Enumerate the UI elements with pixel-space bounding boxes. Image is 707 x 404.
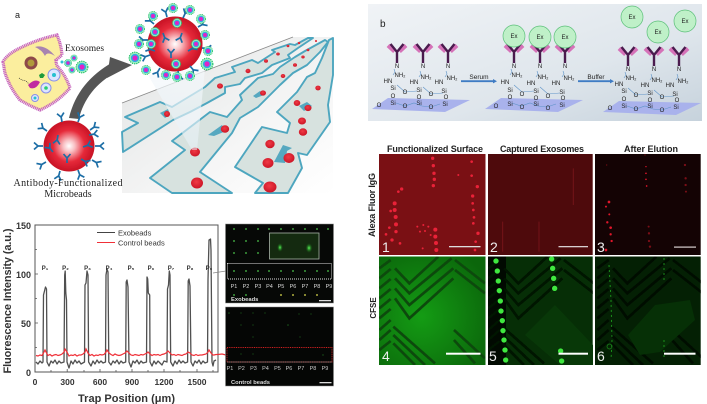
trap labels: P9 bbox=[322, 366, 328, 372]
stage 2: captured exosomes: N bbox=[512, 64, 516, 70]
peak labels bbox=[42, 266, 213, 272]
stage 1: functionalized surface: O bbox=[377, 103, 382, 109]
panel label a: a bbox=[15, 10, 20, 20]
stage 2: captured exosomes: Si bbox=[533, 89, 539, 95]
trap labels: P7 bbox=[298, 366, 304, 372]
stage 2: captured exosomes: O bbox=[494, 104, 499, 110]
arrow: Serum bbox=[461, 74, 497, 83]
dotted selection bbox=[228, 264, 332, 279]
micrograph 1 bbox=[379, 154, 486, 255]
trap labels: P3 bbox=[250, 366, 257, 372]
released Ex circles: Ex bbox=[654, 30, 662, 36]
legend: Exobeads bbox=[118, 228, 152, 238]
stage 3: after elution: HN bbox=[666, 83, 674, 89]
arrow: Serum: Serum bbox=[469, 74, 489, 81]
stage 2: captured exosomes: Si bbox=[559, 103, 565, 109]
stage 1: functionalized surface: Si bbox=[441, 89, 447, 95]
bead dots bbox=[233, 228, 329, 296]
x tick labels: 1200 bbox=[155, 377, 174, 387]
label 3 and scale bar: 3 bbox=[597, 239, 605, 255]
stage 1: functionalized surface: O bbox=[391, 94, 396, 100]
stage 1: functionalized surface: NH₂ bbox=[420, 75, 432, 81]
stage 3: after elution: Si bbox=[647, 91, 653, 97]
x tick labels: 300 bbox=[60, 377, 75, 387]
stage 3: after elution: N bbox=[626, 67, 630, 73]
stage 2: captured exosomes: Si bbox=[559, 90, 565, 96]
trap labels: P2 bbox=[238, 366, 245, 372]
dim bead dots bbox=[228, 312, 324, 356]
x tick labels bbox=[33, 377, 207, 387]
peak labels: P₇ bbox=[168, 266, 175, 272]
trap labels: P6 bbox=[286, 366, 292, 372]
label 6 and scale bar: 6 bbox=[597, 348, 605, 364]
peak labels: P₅ bbox=[128, 266, 135, 272]
x tick labels: 0 bbox=[33, 377, 38, 387]
trap labels bbox=[227, 366, 328, 372]
trap labels: P2 bbox=[243, 284, 249, 290]
stage 2: captured exosomes: N bbox=[538, 64, 542, 70]
microfluidic chip bbox=[122, 37, 333, 193]
stage 3: after elution: NH₂ bbox=[678, 79, 689, 85]
trap labels: P8 bbox=[310, 366, 316, 372]
legend bbox=[97, 228, 165, 248]
stage 1: functionalized surface: O bbox=[403, 90, 408, 96]
stage 2: captured exosomes: O bbox=[508, 95, 513, 101]
stage 3: after elution: O bbox=[660, 108, 665, 114]
label Antibody-Functionalized Microbeads: Antibody-Functionalized bbox=[14, 178, 122, 189]
stage 2: captured exosomes: O bbox=[546, 106, 551, 112]
row label CFSE: CFSE bbox=[369, 297, 378, 319]
image label: Exobeads bbox=[231, 297, 258, 303]
stage 3: after elution: Si bbox=[621, 89, 627, 95]
stage 2: captured exosomes: HN bbox=[552, 81, 560, 87]
stage 1: functionalized surface: Si bbox=[442, 102, 448, 108]
stage 1: functionalized surface: Si bbox=[390, 101, 396, 107]
stage 1: functionalized surface: Si bbox=[416, 101, 422, 107]
stage 1: functionalized surface: O bbox=[417, 95, 422, 101]
stage 2: captured exosomes: O bbox=[520, 92, 525, 98]
stage 2: captured exosomes: NH₂ bbox=[564, 76, 575, 82]
captured Ex circles bbox=[503, 25, 576, 48]
cell with exosomes bbox=[3, 35, 88, 110]
y tick labels: 100 bbox=[16, 270, 31, 280]
stage 2: captured exosomes: O bbox=[534, 96, 539, 102]
stage 1: functionalized surface: HN bbox=[410, 80, 418, 86]
stage 2: captured exosomes: Si bbox=[507, 102, 513, 108]
micrograph 2 bbox=[488, 154, 593, 255]
exosome-loaded microbead bbox=[129, 4, 213, 82]
trap labels: P9 bbox=[326, 284, 332, 290]
inset bbox=[270, 233, 319, 259]
stage 2: captured exosomes: O bbox=[561, 96, 566, 102]
stage 1: functionalized surface: HN bbox=[384, 79, 392, 85]
Control beads trace bbox=[36, 349, 226, 356]
stage 2: captured exosomes: HN bbox=[501, 80, 509, 86]
stage 1: functionalized surface: N bbox=[446, 64, 450, 70]
chart: fluorescence intensity vs trap position bbox=[2, 221, 226, 404]
trap labels: P5 bbox=[274, 366, 281, 372]
bead dots bbox=[493, 256, 564, 364]
stage 3: after elution: Si bbox=[672, 92, 678, 98]
x tick labels: 900 bbox=[125, 377, 139, 387]
trap labels: P3 bbox=[255, 284, 261, 290]
stage 3: after elution: O bbox=[634, 93, 639, 99]
stage 2: captured exosomes: NH₂ bbox=[512, 73, 523, 79]
trap labels bbox=[231, 284, 332, 290]
trap labels: P4 bbox=[262, 366, 269, 372]
peak labels: P₉ bbox=[206, 266, 213, 272]
peak labels: P₆ bbox=[148, 266, 155, 272]
captured Ex circles: Ex bbox=[510, 34, 518, 40]
stage 3: after elution: O bbox=[660, 95, 665, 101]
column headings: Functionalized Surface bbox=[387, 144, 483, 154]
peak labels: P₈ bbox=[187, 266, 194, 272]
stage 1: functionalized surface: Si bbox=[390, 86, 396, 92]
trap labels: P5 bbox=[278, 284, 284, 290]
panel: Control beads fluorescence image bbox=[226, 307, 334, 386]
stage 1: functionalized surface: O bbox=[444, 95, 449, 101]
stage 3: after elution: O bbox=[648, 98, 653, 104]
peak labels: P₄ bbox=[106, 266, 113, 272]
column headings: After Elution bbox=[624, 144, 678, 154]
stage 3: after elution: Si bbox=[673, 105, 679, 111]
stage 1: functionalized surface: N bbox=[421, 64, 425, 70]
trap labels: P4 bbox=[266, 284, 273, 290]
label Antibody-Functionalized Microbeads: Microbeads bbox=[44, 189, 92, 200]
arrow: Buffer bbox=[578, 74, 614, 83]
label 2 and scale bar: 2 bbox=[490, 239, 498, 255]
red selection bbox=[227, 348, 332, 362]
antibody-functionalized microbead bbox=[34, 112, 104, 181]
arrow: Buffer: Buffer bbox=[587, 74, 605, 81]
x tick labels: 600 bbox=[93, 377, 107, 387]
image label: Control beads bbox=[231, 380, 270, 386]
y axis title: Fluorescence Intensity (a.u.) bbox=[2, 228, 14, 374]
panel: a, microfluidic capture schematic bbox=[3, 4, 333, 200]
panel: b, surface chemistry bbox=[368, 4, 702, 121]
stage 3: after elution: O bbox=[608, 106, 613, 112]
trap labels: P7 bbox=[302, 284, 308, 290]
captured Ex circles: Ex bbox=[536, 35, 544, 41]
stage 3: after elution: Si bbox=[647, 104, 653, 110]
stage 1: functionalized surface: NH₂ bbox=[446, 76, 458, 82]
axes frame bbox=[35, 225, 218, 372]
stage 1: functionalized surface: HN bbox=[435, 80, 443, 86]
stage 2: captured exosomes: HN bbox=[527, 81, 535, 87]
y tick labels: 150 bbox=[16, 221, 31, 231]
stage 2: captured exosomes: O bbox=[520, 105, 525, 111]
stage 3: after elution: HN bbox=[615, 82, 623, 88]
stage 3: after elution: NH₂ bbox=[626, 76, 637, 82]
stage 1: functionalized surface: O bbox=[403, 104, 408, 110]
connector arrow to image bbox=[213, 271, 226, 273]
row label Alexa Fluor IgG: Alexa Fluor IgG bbox=[367, 173, 377, 237]
stage 2: captured exosomes: O bbox=[546, 94, 551, 100]
peak labels: P₃ bbox=[84, 266, 91, 272]
x tick labels: 1500 bbox=[188, 377, 207, 387]
stage 3: after elution: N bbox=[677, 67, 681, 73]
panel label b: b bbox=[380, 19, 386, 30]
stage 3: after elution: HN bbox=[641, 83, 649, 89]
released Ex circles bbox=[621, 6, 696, 43]
legend: Control beads bbox=[118, 238, 165, 248]
y tick labels: 0 bbox=[26, 368, 31, 378]
panel: Exobeads fluorescence image bbox=[226, 224, 334, 303]
released Ex circles: Ex bbox=[681, 19, 689, 25]
stage 3: after elution: O bbox=[622, 97, 627, 103]
stage 1: functionalized surface: N bbox=[395, 64, 399, 70]
stage 2: captured exosomes: Si bbox=[507, 88, 513, 94]
micrograph 6 bbox=[595, 256, 703, 365]
stage 1: functionalized surface: O bbox=[429, 92, 434, 98]
micrograph 5 bbox=[488, 256, 594, 365]
curved arrow bbox=[69, 57, 132, 119]
label Exosomes: Exosomes bbox=[65, 44, 104, 54]
stage 2: captured exosomes: N bbox=[563, 64, 567, 70]
stage 2: captured exosomes bbox=[485, 44, 583, 112]
micrograph 3 bbox=[595, 154, 701, 255]
stage 3: after elution: N bbox=[652, 67, 656, 73]
column headings bbox=[387, 144, 678, 154]
y tick labels: 50 bbox=[21, 319, 31, 329]
trap labels: P6 bbox=[290, 284, 296, 290]
stage 3: after elution: O bbox=[634, 107, 639, 113]
stage 3: after elution: NH₂ bbox=[652, 78, 663, 84]
column headings: Captured Exosomes bbox=[500, 144, 584, 154]
y tick labels bbox=[16, 221, 31, 378]
stage 1: functionalized surface: O bbox=[429, 105, 434, 111]
captured Ex circles: Ex bbox=[561, 35, 569, 41]
peak labels: P₂ bbox=[62, 266, 69, 272]
stage 1: functionalized surface: Si bbox=[416, 88, 422, 94]
stage 2: captured exosomes: Si bbox=[533, 102, 539, 108]
label Antibody-Functionalized Microbeads bbox=[14, 178, 122, 200]
label 1 and scale bar: 1 bbox=[382, 239, 390, 255]
stage 3: after elution bbox=[603, 47, 701, 115]
label 5 and scale bar: 5 bbox=[489, 348, 497, 364]
stage 1: functionalized surface: NH₂ bbox=[394, 73, 406, 79]
trap labels: P8 bbox=[314, 284, 320, 290]
micrograph 4 bbox=[379, 256, 486, 365]
trap labels: P1 bbox=[231, 284, 237, 290]
stage 3: after elution: O bbox=[675, 98, 680, 104]
trap labels: P1 bbox=[227, 366, 233, 372]
stage 1: functionalized surface bbox=[372, 44, 470, 112]
stage 2: captured exosomes: NH₂ bbox=[538, 75, 549, 81]
label 4 and scale bar: 4 bbox=[382, 348, 390, 364]
peak labels: P₁ bbox=[42, 266, 49, 272]
released Ex circles: Ex bbox=[628, 15, 636, 21]
Exobeads trace bbox=[36, 239, 216, 368]
stage 3: after elution: Si bbox=[621, 104, 627, 110]
